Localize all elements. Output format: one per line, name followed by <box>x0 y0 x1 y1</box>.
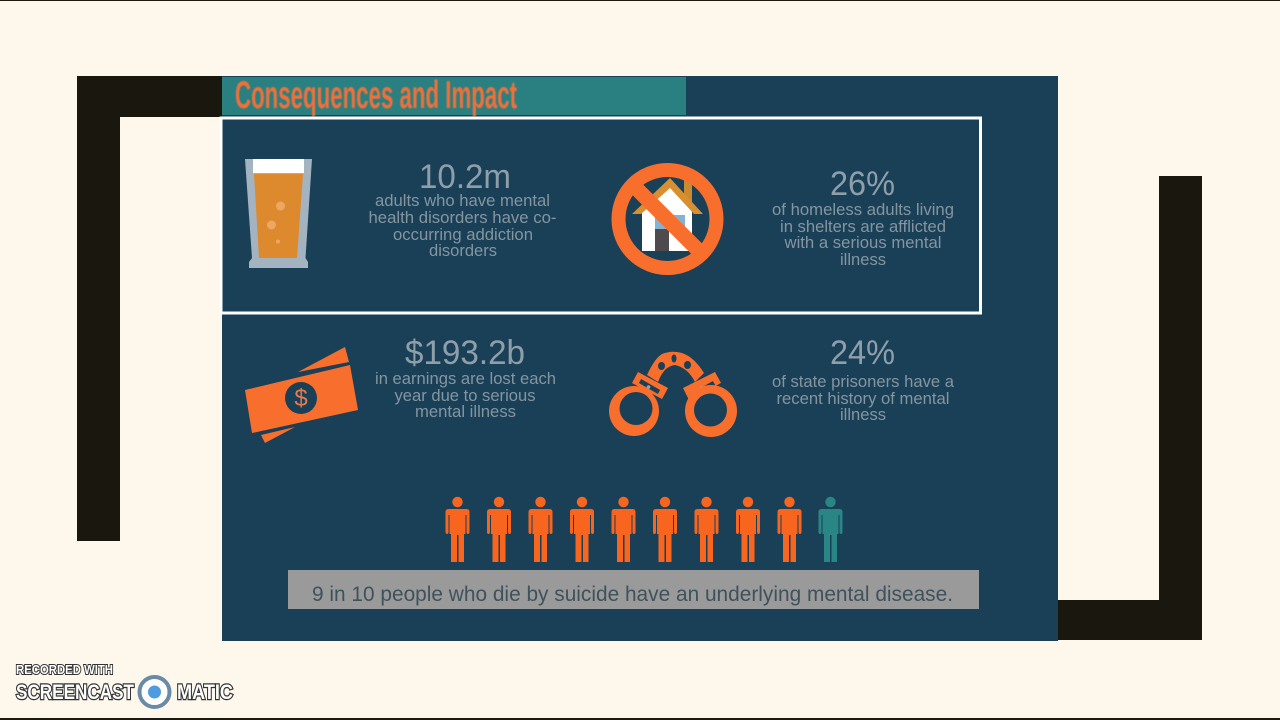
screencast-o-matic watermark <box>16 662 233 707</box>
stat: $193.2b earnings: year due to serious <box>394 386 536 405</box>
icon: money bills <box>245 347 358 443</box>
callout bar <box>288 570 979 609</box>
screencast-o-matic watermark: RECORDED WITH <box>16 662 113 677</box>
stat: $193.2b earnings: mental illness <box>415 402 516 421</box>
stat: 26% homeless: with a serious mental <box>784 233 942 252</box>
stat: 26% homeless: 26% <box>830 165 895 203</box>
stat: 10.2m adults: occurring addiction <box>393 225 533 244</box>
right black bracket frame <box>1055 176 1202 640</box>
callout bar: 9 in 10 people who die by suicide have an underlying mental disease. <box>312 583 953 606</box>
stat: $193.2b earnings: in earnings are lost each <box>375 369 556 388</box>
stat: $193.2b earnings: $193.2b <box>405 334 525 372</box>
stat: 10.2m adults: disorders <box>429 241 497 260</box>
main navy panel <box>222 76 1058 641</box>
stat: 24% prisoners: illness <box>840 405 886 424</box>
stat: 10.2m adults <box>368 158 556 260</box>
stat: 10.2m adults: 10.2m <box>419 158 511 196</box>
icon: beer glass <box>245 159 312 268</box>
stat: 24% prisoners: 24% <box>830 334 895 372</box>
stat: 26% homeless: in shelters are afflicted <box>780 217 946 236</box>
left black bracket frame <box>77 76 225 541</box>
icon: money bills: $ <box>294 385 308 412</box>
stat: 26% homeless <box>772 165 954 269</box>
screencast-o-matic watermark: SCREENCAST <box>16 681 134 704</box>
stat: 26% homeless: of homeless adults living <box>772 200 954 219</box>
stat: 10.2m adults: adults who have mental <box>375 191 550 210</box>
stat: 24% prisoners: recent history of mental <box>776 389 950 408</box>
stat: $193.2b earnings <box>375 334 556 421</box>
white highlight frame <box>221 118 980 313</box>
stat: 24% prisoners <box>772 334 955 424</box>
stat: 10.2m adults: health disorders have co- <box>368 208 556 227</box>
title banner <box>222 74 686 117</box>
pictogram: 9 in 10 people <box>446 497 842 562</box>
stat: 26% homeless: illness <box>840 250 886 269</box>
icon: handcuffs <box>609 352 737 437</box>
title: Consequences and Impact <box>235 74 517 117</box>
screencast-o-matic watermark: MATIC <box>177 681 233 704</box>
icon: no house <box>618 170 716 268</box>
stat: 24% prisoners: of state prisoners have a <box>772 372 955 391</box>
